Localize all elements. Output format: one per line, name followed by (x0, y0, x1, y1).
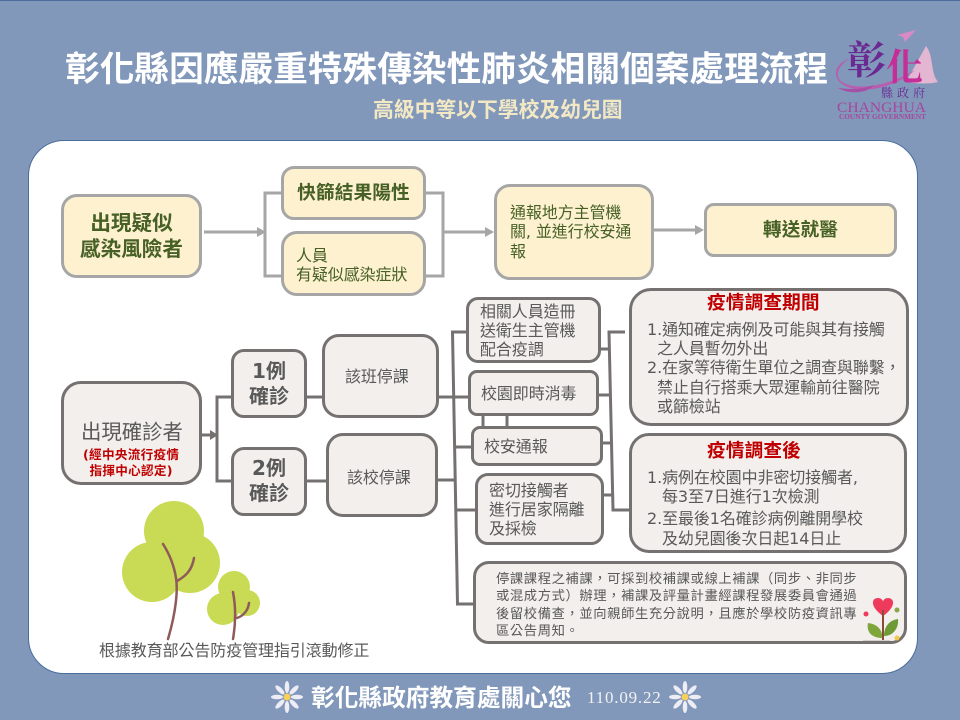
list: during investigation: 2.在家等待衛生單位之調查與聯繫， (647, 358, 901, 377)
box: 1 confirmed case: 確診 (249, 384, 289, 408)
box: transfer to hospital (704, 203, 897, 257)
box: close contacts (475, 473, 604, 545)
illustration: trees (122, 501, 260, 640)
list: during investigation (647, 320, 901, 416)
panel: after investigation (629, 433, 907, 553)
note text (496, 572, 857, 639)
logo: Changhua County Government: 化 (886, 37, 923, 91)
box: 1 confirmed case: 1例 (252, 358, 286, 382)
box: 2 confirmed cases: 確診 (249, 480, 289, 504)
box: campus safety report (471, 426, 603, 466)
list: after investigation item 2: 及幼兒園後次日起14日止 (662, 529, 841, 548)
heading: during investigation: 疫情調查期間 (707, 293, 820, 314)
list: after investigation item 1: 每3至7日進行1次檢測 (662, 487, 819, 506)
connectors: lower confirmed-case flow (202, 332, 629, 604)
panel: during investigation (629, 288, 909, 426)
list: after investigation item 2: 2.至最後1名確診病例離開學校 (647, 509, 863, 528)
box: staff with suspected symptoms: 有疑似感染症狀 (296, 264, 407, 284)
logo: Changhua County Government: CHANGHUA (837, 100, 927, 116)
box: class suspended: 該班停課 (345, 366, 409, 386)
footnote: 根據教育部公告防疫管理指引滾動修正 (99, 641, 369, 660)
box: close contacts: 密切接觸者 (489, 480, 569, 500)
box: school suspended (326, 433, 438, 517)
box: positive rapid test (281, 166, 426, 220)
confirmed case heading: 出現確診者 (81, 420, 183, 444)
logo: Changhua County Government: COUNTY GOVERNMENT (839, 113, 926, 121)
box: staff with suspected symptoms: 人員 (296, 246, 328, 264)
box: 2 confirmed cases: 2例 (252, 456, 286, 480)
box: campus disinfection (468, 370, 599, 416)
logo: Changhua County Government (836, 30, 938, 121)
note text: 或混成方式）辦理，補課及評量計畫經課程發展委員會通過 (496, 589, 857, 604)
box: campus safety report: 校安通報 (484, 436, 548, 456)
box: class suspended (322, 334, 439, 418)
panel: make-up classes note (473, 561, 907, 644)
box: close contacts: 及採檢 (489, 518, 537, 538)
list: during investigation: 1.通知確定病例及可能與其有接觸 (647, 320, 885, 339)
box: confirmed case (61, 381, 202, 485)
box: staff list: 相關人員造冊 (480, 302, 575, 320)
box: report to authorities: 通報地方主管機 (510, 203, 621, 222)
top edge line (0, 0, 960, 1)
list: after investigation item 1: 1.病例在校園中非密切接觸者, (647, 468, 858, 487)
box: report to authorities: 報 (510, 242, 526, 261)
list: after investigation item 2 (647, 509, 863, 548)
icon: daisy left (271, 681, 303, 713)
box: transfer to hospital: 轉送就醫 (763, 220, 838, 240)
box: 2 confirmed cases (231, 447, 307, 516)
logo: Changhua County Government: 縣政府 (881, 84, 929, 101)
note text: 後留校備查，並向親師生充分說明，且應於學校防疫資訊專 (496, 607, 857, 622)
logo: Changhua County Government: 彰 (847, 30, 886, 86)
box: suspected risk person (61, 194, 202, 278)
list: after investigation item 1 (647, 468, 858, 506)
footer date: 110.09.22 (587, 688, 662, 707)
list: during investigation: 或篩檢站 (657, 397, 721, 416)
box: report to authorities: 關, 並進行校安通 (510, 222, 631, 241)
box: close contacts: 進行居家隔離 (489, 500, 584, 518)
box: suspected risk person: 出現疑似 (90, 211, 173, 235)
box: staff list: 配合疫調 (480, 340, 544, 358)
icon: heart flower (863, 598, 900, 641)
note text: 區公告周知。 (496, 624, 579, 639)
note text: 停課課程之補課，可採到校補課或線上補課（同步、非同步 (496, 572, 857, 587)
box: campus disinfection: 校園即時消毒 (481, 384, 576, 402)
box: 1 confirmed case (231, 349, 307, 418)
box: positive rapid test: 快篩結果陽性 (297, 182, 410, 204)
list: during investigation: 禁止自行搭乘大眾運輸前往醫院 (657, 378, 880, 397)
subtitle: 高級中等以下學校及幼兒園 (373, 98, 623, 122)
list: during investigation: 之人員暫勿外出 (657, 339, 768, 358)
confirmed case note: (經中央流行疫情 (83, 447, 179, 462)
title: 彰化縣因應嚴重特殊傳染性肺炎相關個案處理流程 (65, 50, 828, 90)
box: staff with suspected symptoms (281, 231, 426, 296)
footer text: 彰化縣政府教育處關心您 (311, 684, 572, 712)
connectors: upper suspected-case flow (204, 193, 704, 276)
panel: main flow chart (28, 140, 918, 674)
box: staff list: 送衛生主管機 (480, 320, 575, 340)
box: suspected risk person: 感染風險者 (80, 237, 183, 261)
heading: after investigation: 疫情調查後 (707, 441, 801, 462)
confirmed case note: 指揮中心認定) (89, 463, 173, 478)
confirmed case note (83, 447, 179, 478)
box: staff list (466, 297, 601, 363)
box: report to authorities (494, 184, 654, 280)
icon: daisy right (669, 681, 701, 713)
box: school suspended: 該校停課 (347, 468, 411, 486)
